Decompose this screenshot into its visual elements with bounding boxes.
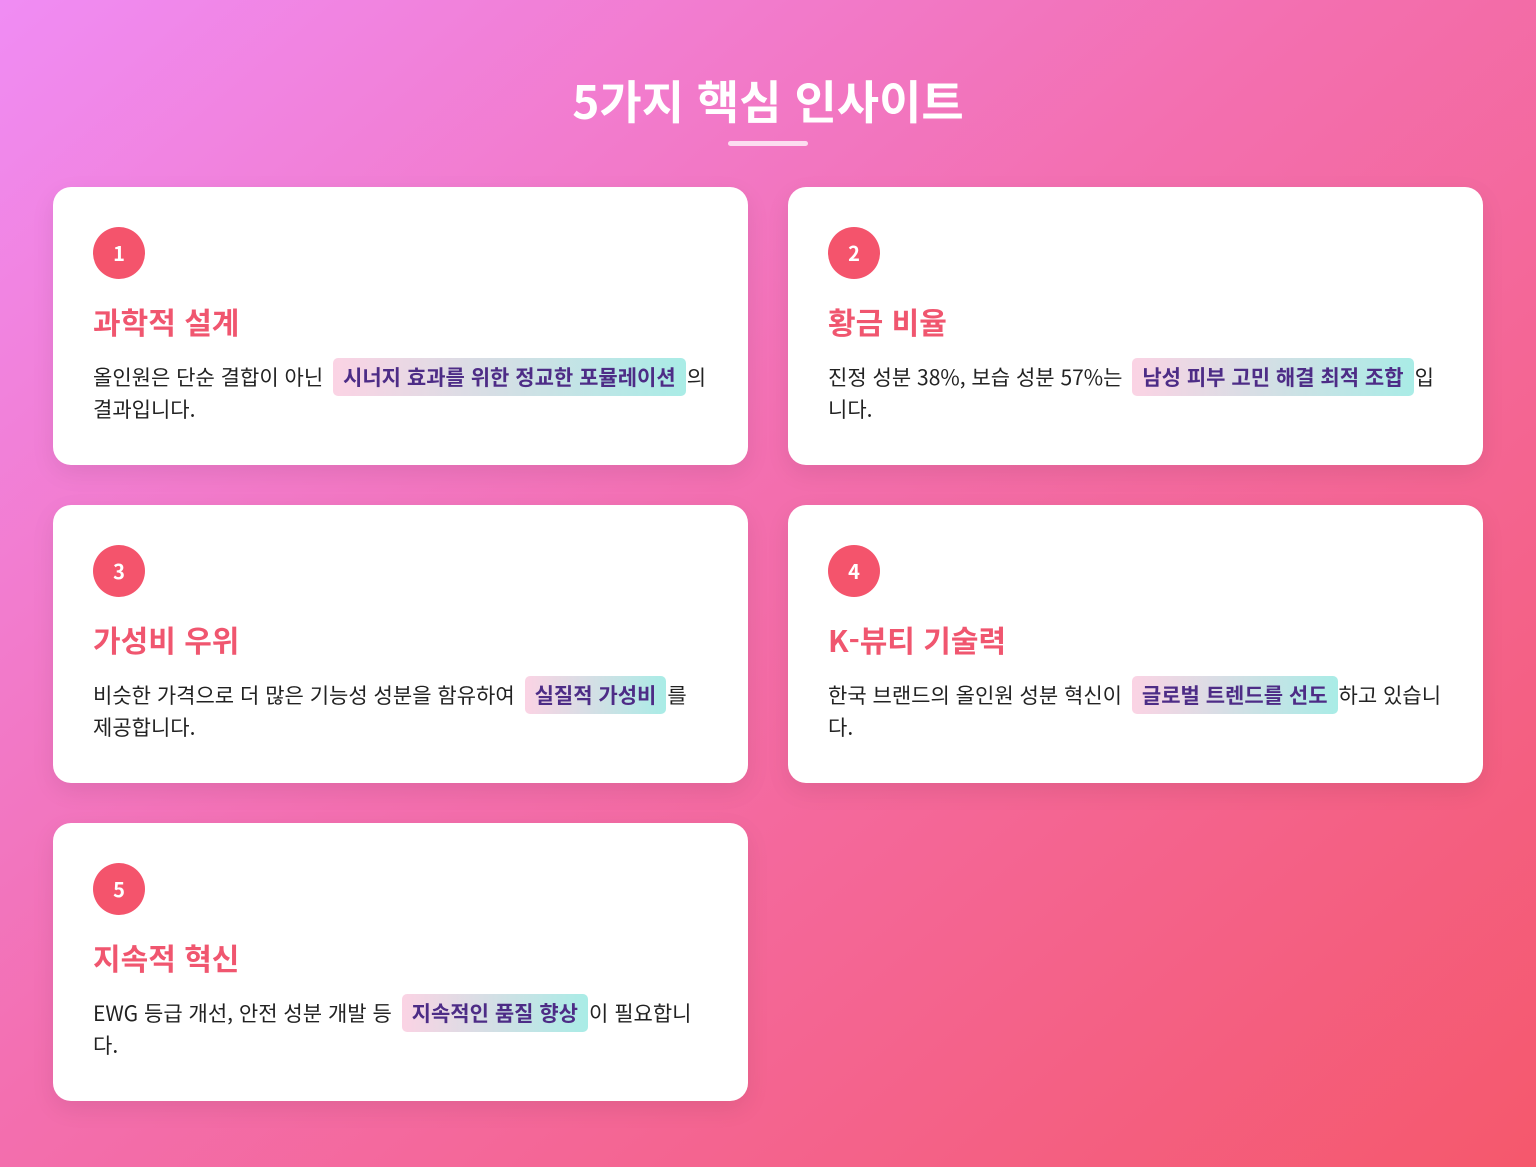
badge 5 bbox=[93, 863, 145, 915]
panel: card 5 bbox=[53, 823, 748, 1101]
heading 1: 과학적 설계 bbox=[93, 299, 239, 343]
text 3: 비슷한 가격으로 더 많은 기능성 성분을 함유하여 실질적 가성비 를 제공합니다. bbox=[93, 680, 687, 742]
badge 4: 4 bbox=[848, 556, 860, 585]
panel: card 4 bbox=[788, 505, 1483, 783]
badge 4 bbox=[828, 545, 880, 597]
badge 2: 2 bbox=[848, 238, 860, 267]
title: 5가지 핵심 인사이트 bbox=[572, 67, 964, 133]
panel: card 2 bbox=[788, 187, 1483, 465]
heading 5: 지속적 혁신 bbox=[93, 935, 239, 979]
badge 1: 1 bbox=[113, 238, 125, 267]
panel: card 3 bbox=[53, 505, 748, 783]
heading 2: 황금 비율 bbox=[828, 299, 947, 343]
badge 3: 3 bbox=[113, 556, 125, 585]
heading 3: 가성비 우위 bbox=[93, 617, 239, 661]
text 2: 진정 성분 38%, 보습 성분 57%는 남성 피부 고민 해결 최적 조합 입니다. bbox=[828, 362, 1434, 424]
badge 5: 5 bbox=[113, 874, 125, 903]
heading 4: K-뷰티 기술력 bbox=[828, 617, 1006, 661]
text 1: 올인원은 단순 결합이 아닌 시너지 효과를 위한 정교한 포뮬레이션 의 결과입니다. bbox=[93, 362, 706, 424]
badge 2 bbox=[828, 227, 880, 279]
text 4: 한국 브랜드의 올인원 성분 혁신이 글로벌 트렌드를 선도 하고 있습니다. bbox=[828, 680, 1441, 742]
text 5: EWG 등급 개선, 안전 성분 개발 등 지속적인 품질 향상 이 필요합니다. bbox=[93, 998, 691, 1060]
badge 3 bbox=[93, 545, 145, 597]
badge 1 bbox=[93, 227, 145, 279]
panel: card 1 bbox=[53, 187, 748, 465]
